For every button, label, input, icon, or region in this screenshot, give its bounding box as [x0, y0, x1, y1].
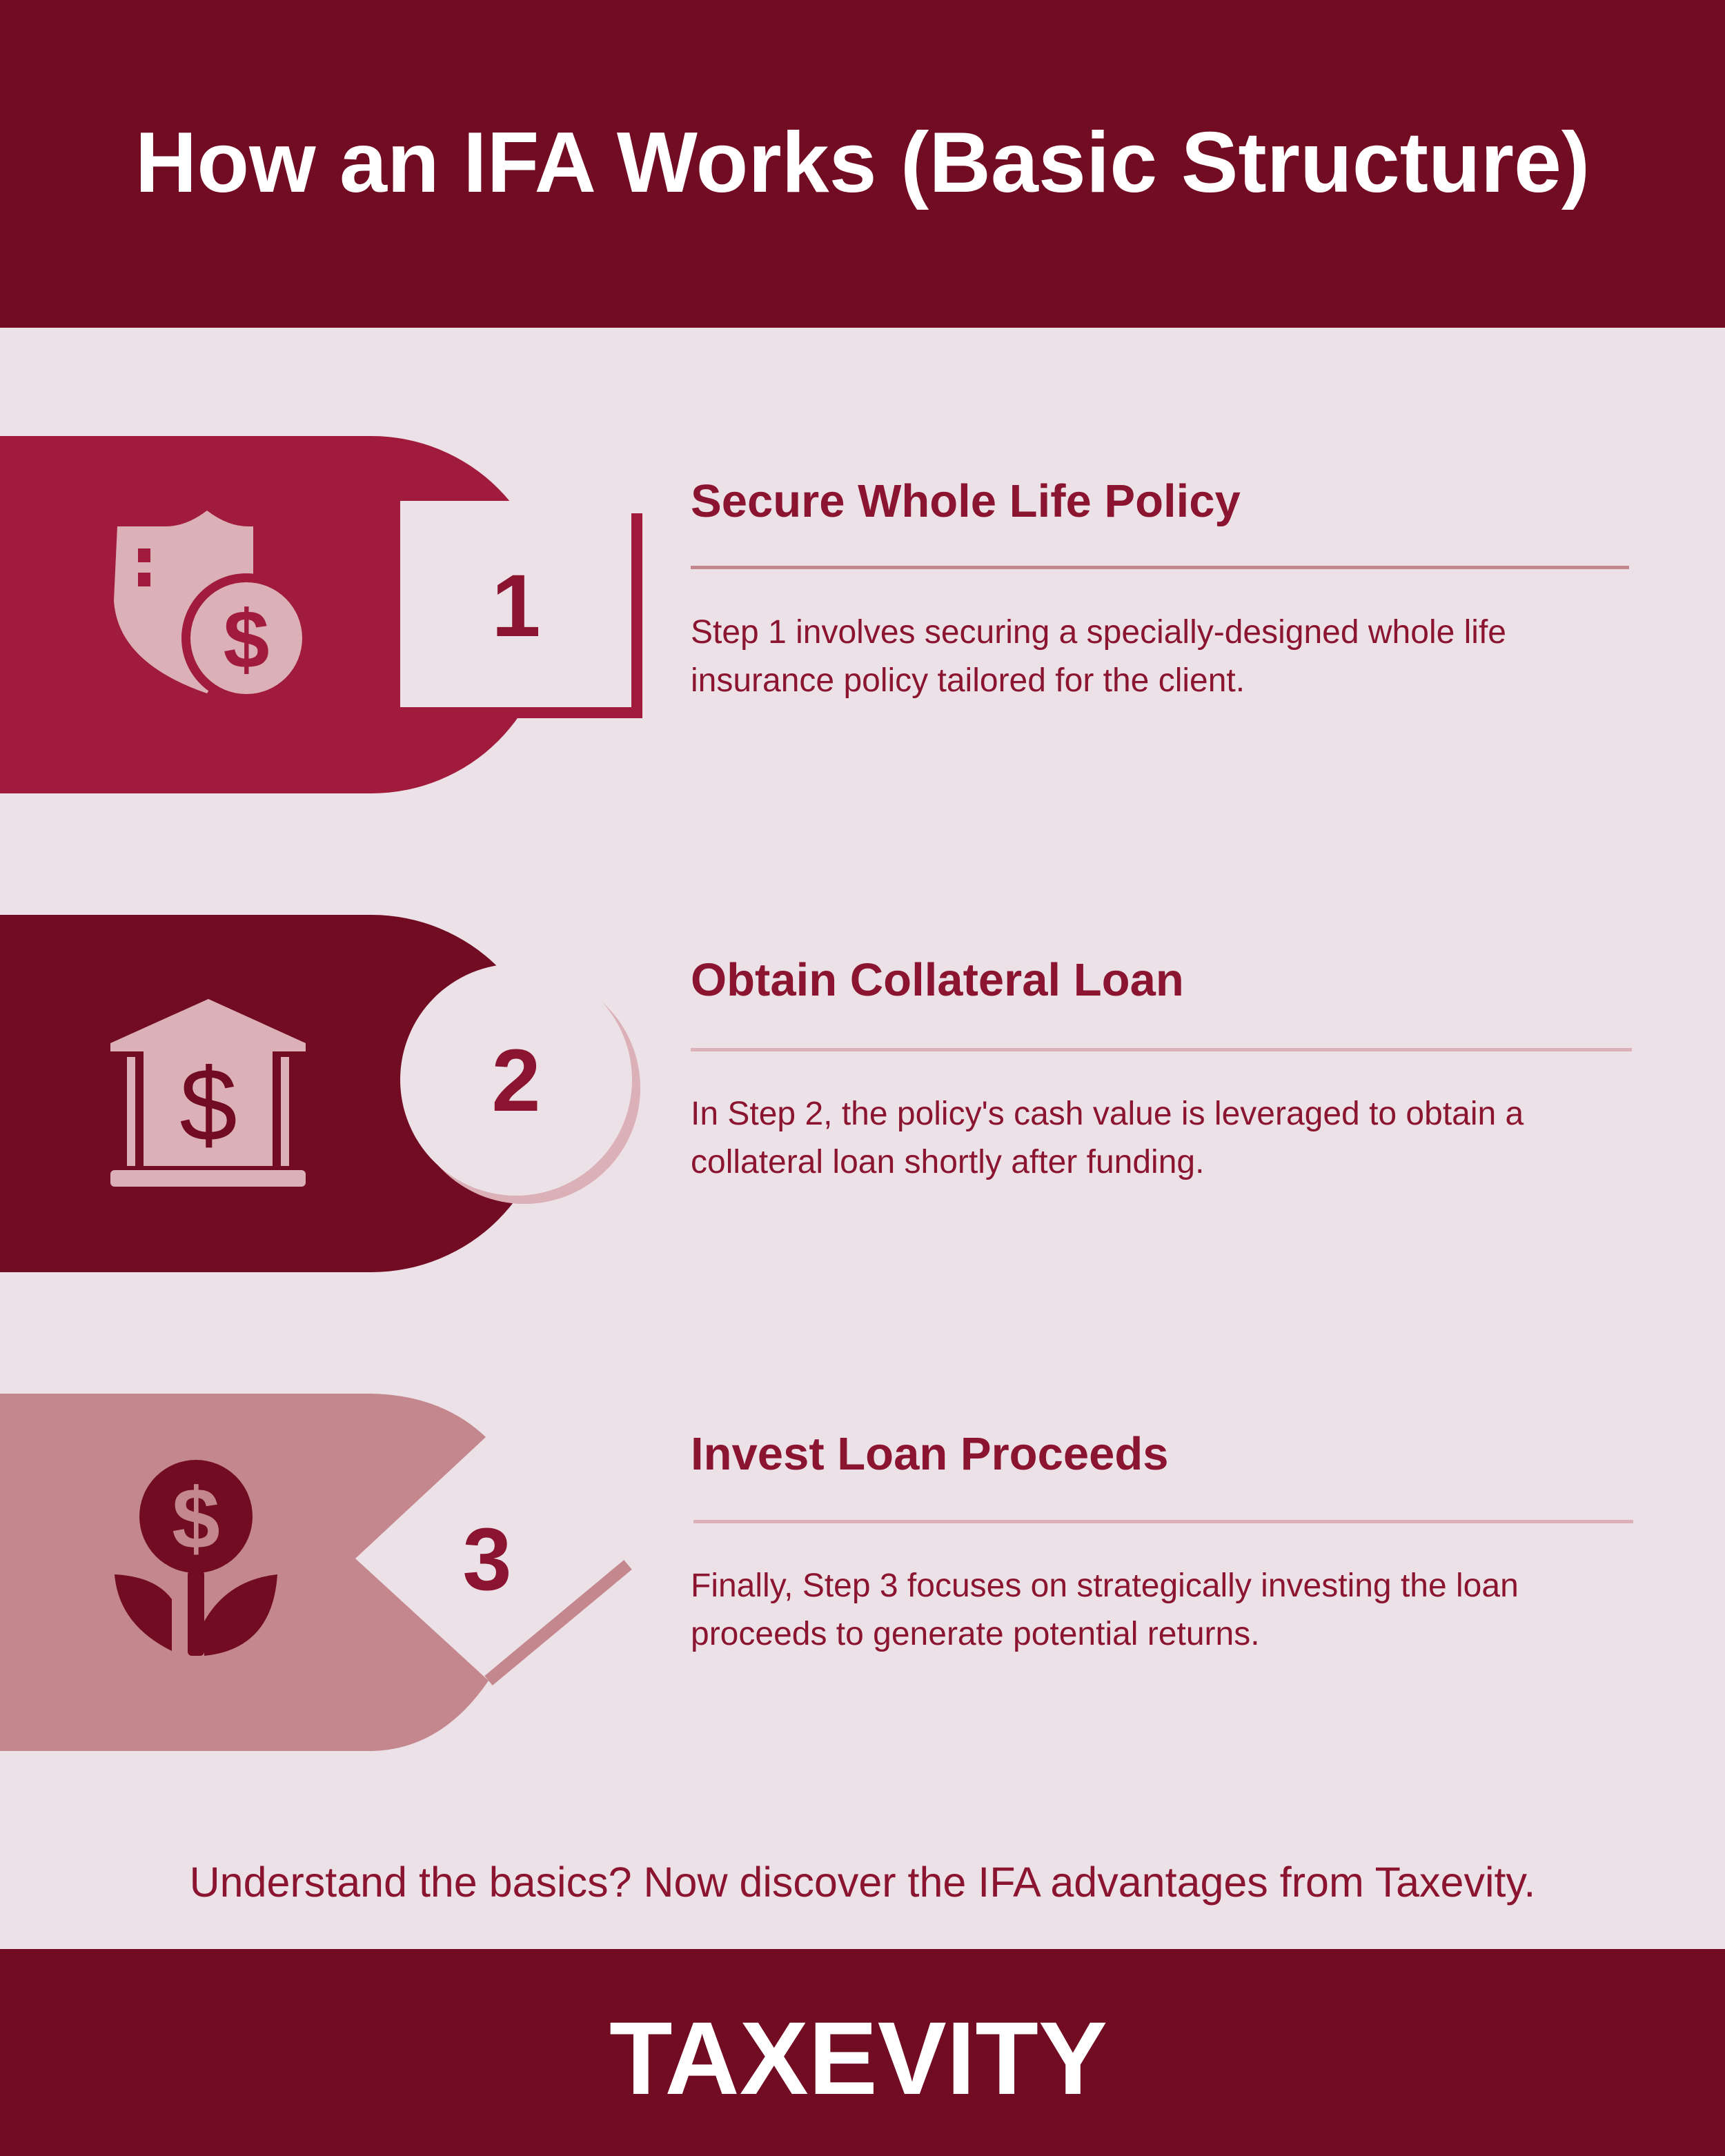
- icon: shield with dollar: $: [224, 593, 269, 686]
- body 3: [691, 1567, 1519, 1652]
- heading 3: Invest Loan Proceeds: [691, 1428, 1169, 1480]
- divider 1: [691, 566, 1629, 569]
- number box 1: 1: [491, 557, 541, 655]
- title bar: [0, 0, 1725, 328]
- icon: bank: [110, 999, 306, 1187]
- body 2: [691, 1096, 1524, 1180]
- step 2 band: [0, 915, 640, 1272]
- divider 2: [691, 1048, 1632, 1051]
- heading 1: Secure Whole Life Policy: [691, 475, 1241, 527]
- body 1: Step 1 involves securing a specially-designed whole life: [691, 614, 1506, 651]
- title: How an IFA Works (Basic Structure): [135, 115, 1590, 210]
- divider 3: [693, 1520, 1633, 1523]
- body 2: In Step 2, the policy's cash value is leveraged to obtain a: [691, 1096, 1524, 1132]
- accent stroke 3: [489, 1565, 628, 1681]
- body 3: Finally, Step 3 focuses on strategically investing the loan: [691, 1567, 1519, 1604]
- heading 2: Obtain Collateral Loan: [691, 954, 1184, 1006]
- icon: shield with dollar: [114, 511, 311, 703]
- icon: money plant: [115, 1460, 277, 1656]
- icon: money plant: $: [172, 1471, 220, 1567]
- body 1: [691, 614, 1506, 699]
- icon: bank: $: [179, 1047, 237, 1163]
- number 3: 3: [462, 1510, 512, 1609]
- step 1 band: [0, 436, 642, 793]
- body 2: collateral loan shortly after funding.: [691, 1144, 1204, 1180]
- number circle 2: 2: [491, 1031, 541, 1130]
- step 3 band: [0, 1394, 628, 1751]
- footer bar: [0, 1949, 1725, 2156]
- number box 1: [400, 501, 642, 718]
- body 3: proceeds to generate potential returns.: [691, 1616, 1260, 1652]
- closing line: Understand the basics? Now discover the IFA advantages from Taxevity.: [190, 1859, 1535, 1906]
- body 1: insurance policy tailored for the client.: [691, 662, 1245, 699]
- number circle 2: [400, 964, 640, 1204]
